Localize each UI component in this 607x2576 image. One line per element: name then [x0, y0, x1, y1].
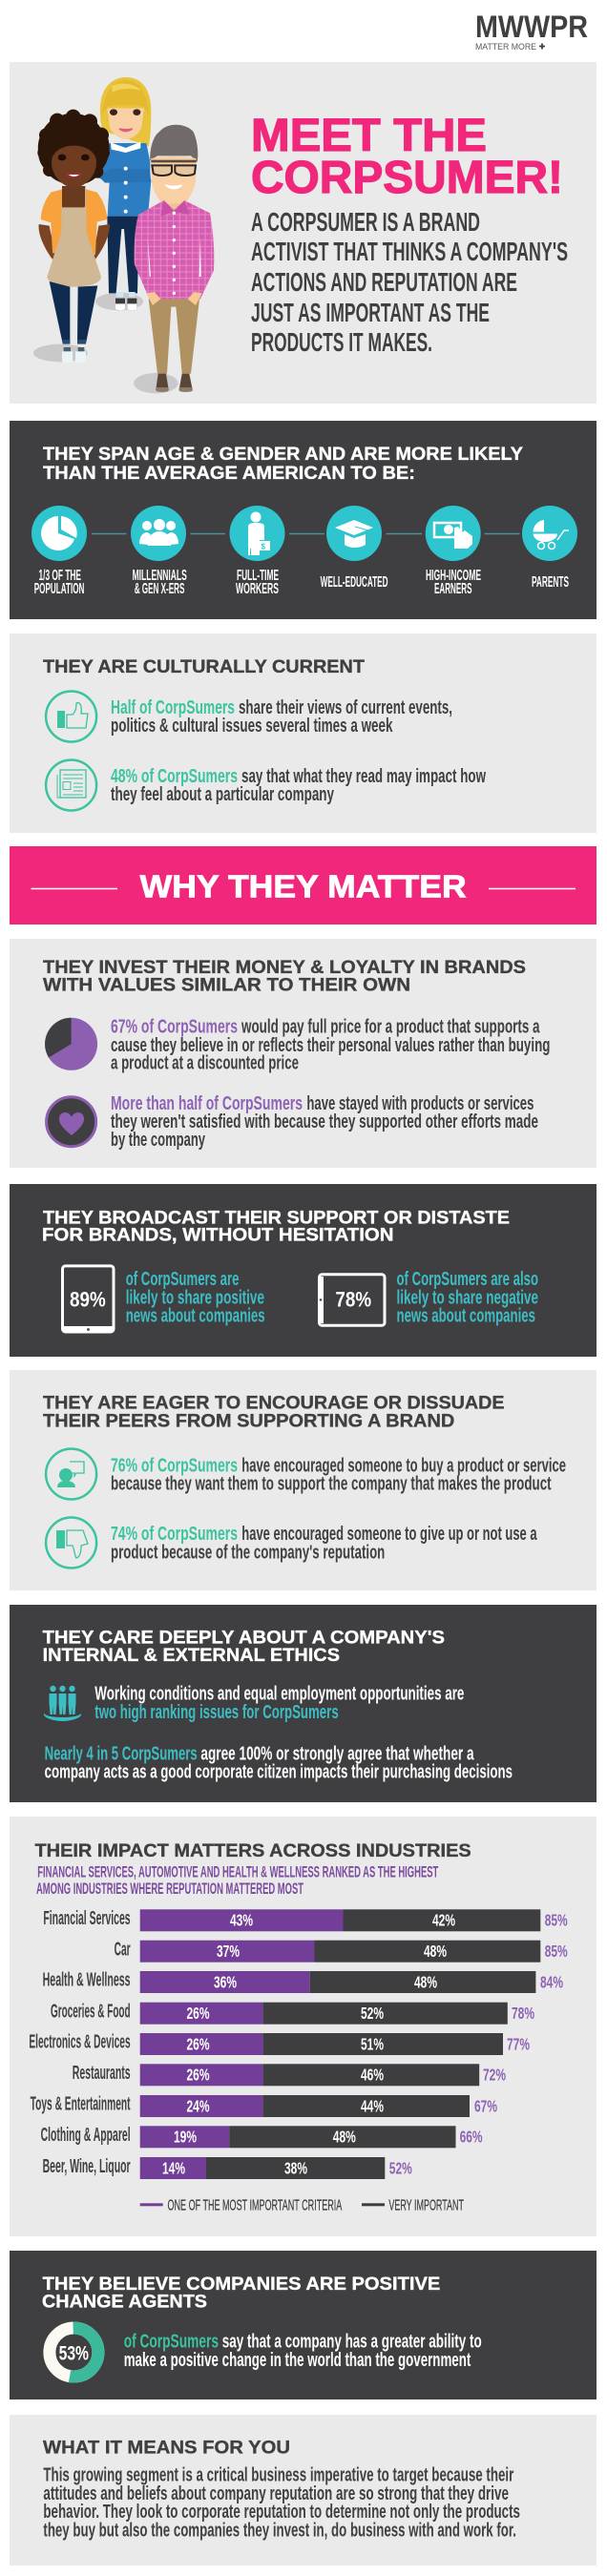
text: positive news — [126, 1269, 265, 1326]
row: toys and entertainment: 24% — [187, 2096, 210, 2115]
row: restaurants: 26% — [187, 2066, 210, 2085]
heading: broadcast: THEY BROADCAST THEIR SUPPORT OR DISTASTE — [43, 1208, 510, 1229]
text: definition — [251, 207, 568, 357]
heading: encourage — [43, 1393, 505, 1431]
row: financial services: Financial Services — [43, 1908, 131, 1929]
panel: positive change agents — [10, 2251, 597, 2399]
heading: culturally current: THEY ARE CULTURALLY CURRENT — [43, 656, 365, 677]
row: health and wellness — [43, 1970, 563, 1993]
row: electronics and devices: 51% — [361, 2034, 384, 2053]
legend: VERY IMPORTANT — [388, 2198, 464, 2213]
labels: demographic groups: HIGH-INCOME — [426, 568, 481, 584]
panel: encourage or dissuade — [10, 1370, 597, 1590]
legend: ONE OF THE MOST IMPORTANT CRITERIA — [168, 2198, 342, 2213]
man — [150, 125, 198, 162]
text: definition: A CORPSUMER IS A BRAND — [251, 207, 480, 237]
row: car: 85% — [545, 1942, 568, 1961]
icon: portrait tablet 89 percent — [63, 1266, 114, 1333]
illustration: three corpsumers — [33, 77, 214, 393]
icon: group of people — [131, 506, 186, 561]
icon: team of employees — [44, 1686, 81, 1721]
text: nearly 4 in 5: agree 100% or strongly agree that whether a — [200, 1743, 474, 1764]
text: 74 percent — [111, 1524, 537, 1563]
heading: ethics: INTERNAL & EXTERNAL ETHICS — [43, 1645, 340, 1666]
labels: demographic groups: WORKERS — [236, 581, 279, 597]
icon: person with speech bubble — [46, 1448, 96, 1500]
row: beer wine liquor: 52% — [389, 2158, 412, 2177]
labels: demographic groups: 1/3 OF THE — [38, 568, 81, 584]
text: half share views: politics & cultural issues several times a week — [111, 716, 393, 737]
row: electronics and devices: 26% — [187, 2034, 210, 2053]
text: definition: PRODUCTS IT MAKES. — [251, 327, 432, 357]
row: health and wellness: 48% — [414, 1972, 437, 1991]
heading: encourage: THEY ARE EAGER TO ENCOURAGE OR DISSUADE — [43, 1393, 505, 1414]
row: toys and entertainment — [31, 2094, 497, 2117]
panel: what it means — [10, 2415, 597, 2566]
panel: ethics — [10, 1605, 597, 1802]
subheading: industries: AMONG INDUSTRIES WHERE REPUTATION MATTERED MOST — [36, 1880, 304, 1898]
row: clothing and apparel: 48% — [333, 2128, 356, 2147]
text: 53 percent — [124, 2332, 482, 2371]
heading: ethics — [43, 1628, 445, 1666]
heading: meet the corpsumer: MEET THE — [251, 111, 487, 161]
heading: meet the corpsumer — [251, 111, 563, 203]
icon: thumbs up — [46, 691, 96, 742]
icon: thumbs down — [46, 1517, 96, 1568]
row: restaurants: 72% — [483, 2066, 506, 2085]
text: positive news: news about companies — [126, 1305, 265, 1326]
row: groceries and food — [51, 2001, 534, 2025]
text: 48 percent read: they feel about a particular company — [111, 784, 335, 805]
heading: age and gender — [43, 444, 523, 484]
panel: demographics — [10, 421, 597, 619]
icon: landscape tablet 78 percent: 78% — [335, 1287, 371, 1311]
text: more than half: by the company — [111, 1130, 206, 1151]
text: more than half — [111, 1093, 538, 1151]
subheading: industries — [36, 1862, 439, 1898]
row: electronics and devices — [29, 2032, 530, 2055]
heading: invest — [43, 957, 526, 996]
row: health and wellness: Health & Wellness — [43, 1970, 131, 1991]
text: 67 percent — [111, 1017, 550, 1074]
text: 74 percent: 74% of CorpSumers — [111, 1524, 238, 1545]
row: electronics and devices: Electronics & Devices — [29, 2032, 131, 2053]
row: groceries and food: 78% — [512, 2004, 534, 2023]
row: beer wine liquor: 14% — [162, 2158, 185, 2177]
row: clothing and apparel — [41, 2125, 483, 2148]
heading: invest: WITH VALUES SIMILAR TO THEIR OWN — [43, 975, 410, 996]
row: clothing and apparel: Clothing & Apparel — [41, 2125, 131, 2146]
text: 67 percent: 67% of CorpSumers — [111, 1017, 238, 1038]
heading: change agents: THEY BELIEVE COMPANIES ARE POSITIVE — [43, 2274, 440, 2295]
icon: portrait tablet 89 percent: 89% — [70, 1287, 106, 1311]
panel: invest money and loyalty — [10, 939, 597, 1168]
text: 74 percent: product because of the company's reputation — [111, 1542, 385, 1563]
text: half share views — [111, 697, 452, 737]
row: financial services: 85% — [545, 1910, 568, 1929]
text: nearly 4 in 5: Nearly 4 in 5 CorpSumers — [45, 1743, 198, 1764]
row: health and wellness: 36% — [214, 1972, 237, 1991]
row: financial services: 43% — [230, 1910, 253, 1929]
heading: change agents — [42, 2274, 440, 2312]
row: financial services: 42% — [432, 1910, 455, 1929]
icon: pie chart — [31, 506, 87, 561]
panel: broadcast support — [10, 1184, 597, 1357]
row: car: Car — [115, 1939, 131, 1960]
labels: demographic groups: & GEN X-ERS — [135, 581, 185, 597]
text: negative news: news about companies — [397, 1305, 535, 1326]
text: positive news: of CorpSumers are — [126, 1269, 239, 1290]
text: 48 percent read: say that what they read may impact how — [241, 766, 486, 787]
labels: demographic groups — [34, 568, 569, 597]
heading: ethics: THEY CARE DEEPLY ABOUT A COMPANY'S — [43, 1628, 445, 1649]
heading: age and gender: THAN THE AVERAGE AMERICAN TO BE: — [43, 463, 415, 484]
text: 76 percent: 76% of CorpSumers — [111, 1455, 238, 1476]
banner: why they matter — [10, 846, 597, 924]
text: 53 percent: say that a company has a greater ability to — [222, 2332, 482, 2353]
heading: age and gender: THEY SPAN AGE & GENDER AND ARE MORE LIKELY — [43, 444, 523, 465]
text: more than half: More than half of CorpSumers — [111, 1093, 303, 1114]
heading: meet the corpsumer: CORPSUMER! — [251, 153, 563, 203]
labels: demographic groups: FULL-TIME — [237, 568, 279, 584]
row: car — [115, 1939, 568, 1963]
dark-haired woman — [38, 114, 110, 185]
text: negative news: likely to share negative — [397, 1287, 538, 1308]
labels: demographic groups: POPULATION — [34, 581, 84, 597]
panel: hero — [10, 62, 597, 404]
row: beer wine liquor — [43, 2156, 412, 2179]
heading: impact: THEIR IMPACT MATTERS ACROSS INDUSTRIES — [34, 1840, 471, 1861]
row: toys and entertainment: Toys & Entertainment — [31, 2094, 131, 2115]
icon: full-time worker: $ — [262, 542, 265, 551]
text: negative news: of CorpSumers are also — [397, 1269, 538, 1290]
logo: MWWPR: MWWPR — [475, 10, 588, 44]
text: half share views: Half of CorpSumers — [111, 697, 235, 718]
row: beer wine liquor: Beer, Wine, Liquor — [43, 2156, 131, 2177]
text: 67 percent: a product at a discounted price — [111, 1053, 299, 1074]
panel: culturally current — [10, 634, 597, 833]
labels: demographic groups: PARENTS — [532, 574, 569, 591]
icon: landscape tablet 78 percent — [318, 1275, 385, 1325]
icon: full-time worker — [229, 506, 284, 561]
donut chart: 53 percent — [50, 2328, 98, 2377]
icon: newspaper — [46, 759, 96, 811]
row: car: 48% — [424, 1942, 447, 1961]
row: restaurants: Restaurants — [73, 2063, 131, 2084]
bar chart: industries — [29, 1908, 568, 2179]
row: groceries and food: 52% — [361, 2004, 384, 2023]
row: beer wine liquor: 38% — [284, 2158, 307, 2177]
donut chart: 53 percent: 53% — [59, 2342, 89, 2364]
text: nearly 4 in 5 — [45, 1743, 513, 1783]
row: car: 37% — [217, 1942, 240, 1961]
text: 48 percent read: 48% of CorpSumers — [111, 766, 238, 787]
row: toys and entertainment: 67% — [474, 2096, 497, 2115]
text: 53 percent: of CorpSumers — [124, 2332, 219, 2353]
heading: broadcast — [42, 1208, 510, 1246]
text: working conditions — [94, 1684, 464, 1723]
text: negative news — [397, 1269, 538, 1326]
row: financial services — [43, 1908, 568, 1931]
text: half share views: share their views of current events, — [239, 697, 452, 718]
icon: stroller — [522, 506, 577, 561]
row: toys and entertainment: 44% — [361, 2096, 384, 2115]
labels: demographic groups: WELL-EDUCATED — [321, 574, 388, 591]
banner: why they matter: WHY THEY MATTER — [140, 868, 467, 904]
icon: heart — [47, 1097, 96, 1147]
heading: encourage: THEIR PEERS FROM SUPPORTING A BRAND — [43, 1410, 454, 1431]
icon: money in hand — [426, 506, 481, 561]
heading: broadcast: FOR BRANDS, WITHOUT HESITATION — [42, 1225, 394, 1246]
text: positive news: likely to share positive — [126, 1287, 264, 1308]
row: electronics and devices: 77% — [507, 2034, 530, 2053]
heading: change agents: CHANGE AGENTS — [42, 2291, 207, 2312]
row: health and wellness: 84% — [540, 1972, 563, 1991]
blonde woman — [100, 77, 151, 146]
text: conclusion — [43, 2465, 520, 2541]
text: working conditions: two high ranking issues for CorpSumers — [94, 1702, 339, 1723]
row: clothing and apparel: 19% — [174, 2128, 197, 2147]
heading: what it means: WHAT IT MEANS FOR YOU — [43, 2438, 290, 2459]
row: restaurants: 46% — [361, 2066, 384, 2085]
icon: graduation cap — [326, 506, 382, 561]
labels: demographic groups: MILLENNIALS — [133, 568, 187, 584]
row: clothing and apparel: 66% — [460, 2128, 483, 2147]
icon: 67 percent pie — [45, 1018, 97, 1070]
heading: invest: THEY INVEST THEIR MONEY & LOYALTY IN BRANDS — [43, 957, 526, 978]
text: 48 percent read — [111, 766, 486, 805]
row: restaurants — [73, 2063, 506, 2086]
labels: demographic groups: EARNERS — [434, 581, 472, 597]
row: groceries and food: 26% — [187, 2004, 210, 2023]
text: 76 percent — [111, 1455, 566, 1495]
row: groceries and food: Groceries & Food — [51, 2001, 131, 2022]
logo: MWWPR: MATTER MORE — [475, 42, 536, 52]
panel: impact across industries — [10, 1817, 597, 2236]
